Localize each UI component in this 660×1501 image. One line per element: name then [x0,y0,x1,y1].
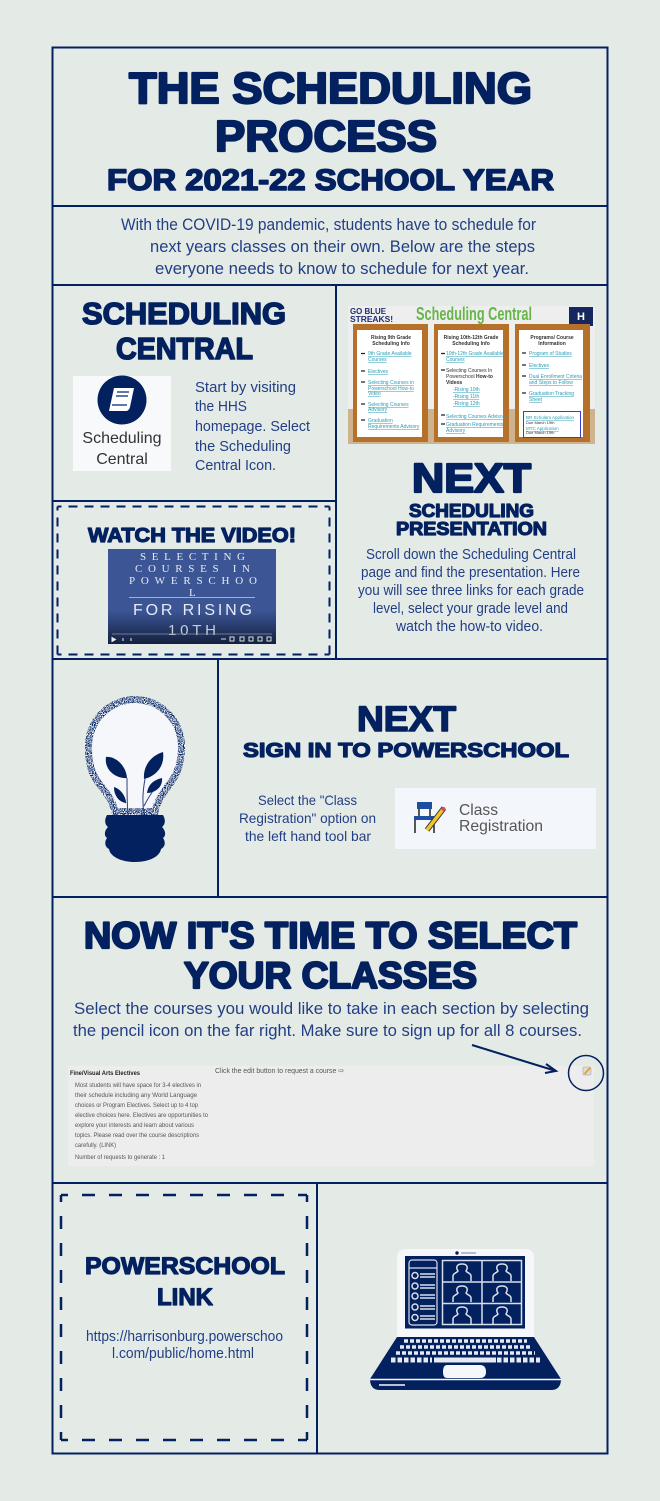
panel: next scheduling presentation [358,455,584,635]
heading: powerschool link: POWERSCHOOL [85,1253,285,1280]
heading: scheduling presentation [396,501,547,539]
video thumbnail [108,549,276,644]
text: powerschool url [86,1329,283,1362]
screenshot: scheduling central page: Program of Studies [529,351,572,357]
screenshot: scheduling central page: 10th-12th Grade Available [446,351,504,357]
icon: scheduling central book: Central [96,451,148,468]
icon: class registration [395,788,596,849]
screenshot: scheduling central page: -Rising 12th [453,401,480,407]
screenshot: scheduling central page: Advisory [368,407,388,413]
screenshot: scheduling central page: Rising 10th-12th Grade [444,335,499,341]
screenshot: scheduling central page: 9th Grade Available [368,351,412,357]
screenshot: scheduling central page: Due March 19th [526,430,554,435]
screenshot: scheduling central page: MTC Application [526,426,559,431]
text: class registration instructions [239,792,376,844]
screenshot: scheduling central page: Electives [368,369,389,375]
screenshot: scheduling central page: Electives [529,363,550,369]
screenshot: scheduling central page: BR Scholars Application [526,415,575,420]
icon: laptop video call [370,1249,561,1390]
heading: select your classes: NOW IT'S TIME TO SELECT [84,915,577,956]
heading: watch the video: WATCH THE VIDEO! [88,525,296,547]
title: PROCESS [215,112,437,161]
text: presentation instructions: watch the how-to video. [395,619,543,635]
screenshot: scheduling central page: H [577,311,585,323]
screenshot: scheduling central page: Graduation Tracking [529,391,574,397]
video thumbnail: COURSES IN [135,563,250,575]
screenshot: scheduling central page: and Steps to Follow [529,380,573,386]
screenshot: scheduling central page: Selecting Courses in [368,380,414,386]
heading: next: NEXT [357,700,456,739]
intro text: everyone needs to know to schedule for next year. [155,259,529,278]
screenshot: scheduling central page: Scheduling Info [452,341,490,347]
screenshot: course request [68,1066,594,1166]
title [107,64,554,197]
heading: select your classes: YOUR CLASSES [184,955,477,996]
heading: next: NEXT [412,455,531,501]
panel: sign in to powerschool [239,700,596,849]
screenshot: course request: Click the edit button to request a course ⇨ [215,1066,345,1075]
screenshot: scheduling central page: Advisory [446,428,466,434]
text: presentation instructions: page and find the presentation. Here [361,565,580,581]
icon: scheduling central book [73,376,171,471]
video thumbnail: L [189,587,196,599]
text: presentation instructions: you will see three links for each grade [358,583,584,599]
icon: light bulb [85,696,185,862]
text: select instructions: the pencil icon on the far right. Make sure to sign up for all 8 courses. [73,1021,582,1040]
screenshot: scheduling central page: Videos [446,380,463,386]
screenshot: scheduling central page: Courses [446,357,465,363]
text: select instructions: Select the courses you would like to take in each section by selecting [74,999,589,1018]
icon: class registration: Registration [459,818,543,835]
screenshot: scheduling central page: Selecting Courses Advisory [446,414,507,420]
text: presentation instructions: level, select your grade level and [373,601,568,617]
text: start instructions: Start by visiting [195,379,296,396]
screenshot: course request: elective choices here. Electives are opportunities to [75,1112,208,1119]
screenshot: scheduling central page: Selecting Courses [368,402,409,408]
intro text [121,215,536,278]
icon: pencil callout [568,1056,604,1090]
screenshot: scheduling central page: Video [368,391,381,397]
text: powerschool url: https://harrisonburg.powerschoo [86,1329,283,1345]
screenshot: scheduling central page [348,304,595,444]
panel: scheduling central [73,296,311,474]
text: start instructions [195,379,311,474]
panel: watch the video [58,506,330,654]
screenshot: scheduling central page: -Rising 10th [453,387,480,393]
heading: powerschool link [85,1253,285,1311]
title: FOR 2021-22 SCHOOL YEAR [107,164,554,197]
heading: scheduling central: CENTRAL [116,331,253,366]
screenshot: course request: Fine/Visual Arts Electives [70,1070,140,1077]
intro text: next years classes on their own. Below are the steps [150,237,535,256]
screenshot: scheduling central page: Programs/ Course [530,335,574,341]
arrow: to pencil icon [472,1045,556,1073]
video thumbnail: POWERSCHOO [129,575,257,587]
screenshot: scheduling central page: GO BLUE [350,307,387,316]
video thumbnail: SELECTING [140,551,245,563]
screenshot: course request: Most students will have space for 3-4 electives in [75,1082,201,1089]
screenshot: scheduling central page: -Rising 11th [453,394,480,400]
heading: scheduling central: SCHEDULING [82,296,286,331]
text: class registration instructions: Registration" option on [239,810,376,826]
title: THE SCHEDULING [129,64,532,113]
screenshot: scheduling central page: Due March 19th [526,420,554,425]
heading: select your classes [84,915,577,996]
screenshot: scheduling central page: Graduation [368,418,393,424]
screenshot: scheduling central page: Powerschool How-to [368,386,414,392]
text: start instructions: homepage. Select [195,418,311,435]
screenshot: scheduling central page: Scheduling Central [416,304,532,324]
heading: scheduling presentation: SCHEDULING [409,501,534,521]
text: class registration instructions: Select the "Class [258,792,357,808]
video thumbnail: FOR RISING [133,602,252,619]
heading: scheduling presentation: PRESENTATION [396,519,547,539]
screenshot: course request: their schedule including any World Language [75,1092,197,1099]
text: select instructions [73,999,589,1040]
text: powerschool url: l.com/public/home.html [112,1346,254,1362]
screenshot: scheduling central page: Powerschool How-to [446,374,493,380]
intro text: With the COVID-19 pandemic, students have to schedule for [121,215,536,234]
text: presentation instructions [358,547,584,635]
screenshot: course request: carefully. (LINK) [75,1142,116,1149]
screenshot: scheduling central page: Scheduling Info [372,341,410,347]
icon: scheduling central book: Scheduling [82,430,162,447]
screenshot: scheduling central page: Information [538,341,566,347]
text: start instructions: the HHS [195,398,247,415]
screenshot: course request: Number of requests to generate : 1 [75,1154,165,1161]
heading: sign in: SIGN IN TO POWERSCHOOL [243,740,569,762]
icon: class registration: Class [459,802,498,819]
screenshot: scheduling central page: Graduation Requirements [446,422,504,428]
heading: powerschool link: LINK [157,1284,214,1311]
video thumbnail: 10TH [168,622,216,639]
screenshot: course request: topics. Please read over the course descriptions [75,1132,200,1139]
screenshot: course request: choices or Program Electives. Select up to 4 top [75,1102,198,1109]
screenshot: scheduling central page: Rising 9th Grade [371,335,411,341]
text: class registration instructions: the left hand tool bar [245,828,371,844]
text: start instructions: Central Icon. [195,457,276,474]
text: start instructions: the Scheduling [195,438,291,455]
screenshot: course request: explore your interests and learn about various [75,1122,195,1129]
screenshot: scheduling central page: Selecting Courses In [446,368,492,374]
panel: powerschool link [61,1195,307,1440]
screenshot: scheduling central page: Dual Enrollment Criteria [529,374,582,380]
layout grid [52,48,608,1454]
screenshot: scheduling central page: Sheet [529,397,543,403]
heading: scheduling central [82,296,286,366]
screenshot: scheduling central page: Requirements Advisory [368,424,420,430]
text: presentation instructions: Scroll down the Scheduling Central [366,547,576,563]
screenshot: scheduling central page: STREAKS! [350,315,393,324]
panel: select your classes [68,915,604,1166]
screenshot: scheduling central page: Courses [368,357,387,363]
